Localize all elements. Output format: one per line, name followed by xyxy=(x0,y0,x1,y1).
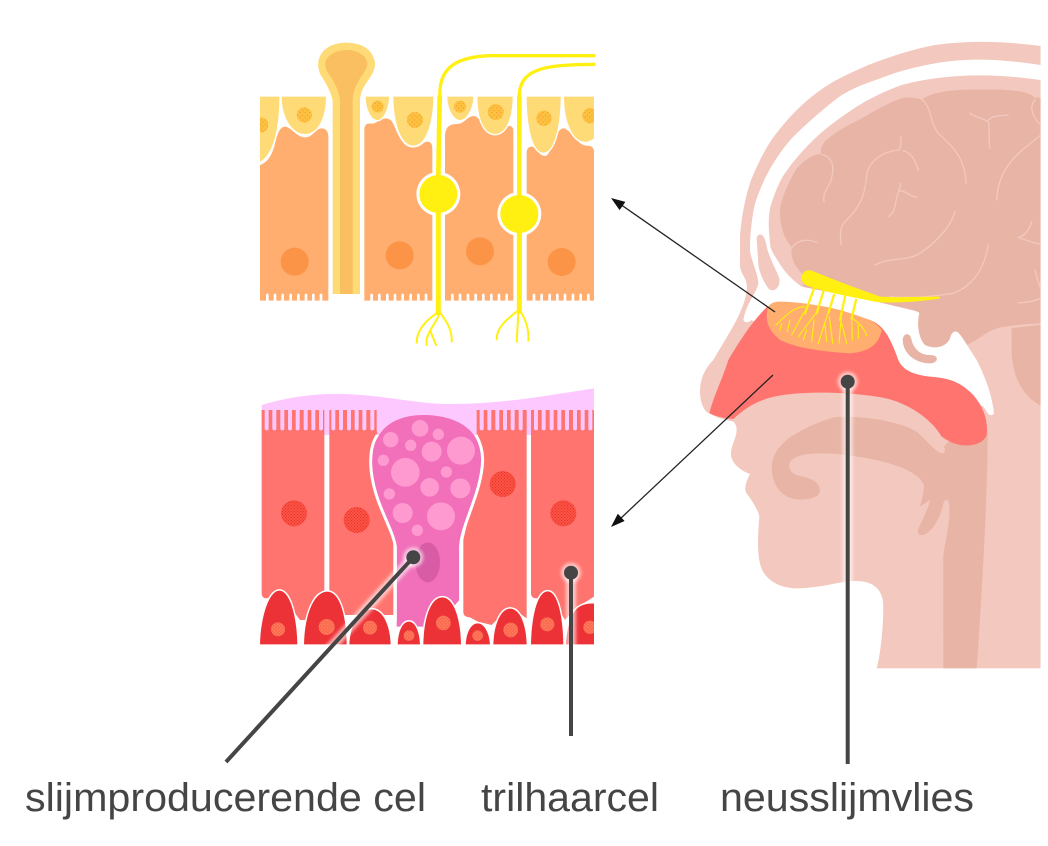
basal cell nuclei xyxy=(271,616,597,641)
goblet cell xyxy=(371,415,483,627)
basal cells (light yellow) xyxy=(260,97,594,162)
goblet nucleus xyxy=(415,542,440,582)
brain folds xyxy=(792,99,1041,303)
pointer: slijmproducerende cel xyxy=(226,547,423,762)
brain xyxy=(780,89,1041,350)
label: trilhaarcel: trilhaarcel xyxy=(481,776,659,820)
head silhouette xyxy=(700,42,1041,668)
olfactory bulb xyxy=(802,270,940,302)
pointer: trilhaarcel xyxy=(561,563,581,736)
white rings around neurons xyxy=(416,172,541,236)
white cavity around the brain and nasal passage xyxy=(743,60,1041,415)
olfactory epithelium (orange) xyxy=(767,302,882,353)
panel: head cross-section xyxy=(700,42,1041,668)
cilia notches xyxy=(267,295,588,305)
nasal mucosa (red) xyxy=(709,307,987,445)
cell nuclei xyxy=(281,237,576,276)
supporting cells (orange) xyxy=(260,116,594,301)
olfactory neurons xyxy=(417,56,594,345)
arrow: mucosa to detail xyxy=(611,375,773,527)
nasal turbinate xyxy=(903,334,937,363)
panel: respiratory epithelium detail xyxy=(260,388,597,647)
frontal sinus xyxy=(757,234,779,290)
ciliated cells xyxy=(262,410,594,625)
label: slijmproducerende cel: slijmproducerende cel xyxy=(25,776,426,820)
back of head xyxy=(1012,325,1041,406)
mucus layer xyxy=(262,388,594,435)
basal cell nuclei xyxy=(253,101,598,133)
neuron cell bodies xyxy=(419,175,538,233)
label: neusslijmvlies: neusslijmvlies xyxy=(720,776,974,820)
cilia gaps xyxy=(267,407,590,428)
olfactory rod cell xyxy=(318,43,375,294)
mucus vesicles xyxy=(378,420,475,536)
basal cells (red) xyxy=(260,591,597,647)
arrow: olfactory area to detail xyxy=(611,198,775,312)
olfactory nerves xyxy=(776,288,867,343)
ciliated cell nuclei xyxy=(281,471,576,533)
panel: olfactory epithelium detail xyxy=(253,43,598,345)
pointer: neusslijmvlies xyxy=(838,372,858,764)
palate, tongue and pharynx xyxy=(772,417,988,668)
